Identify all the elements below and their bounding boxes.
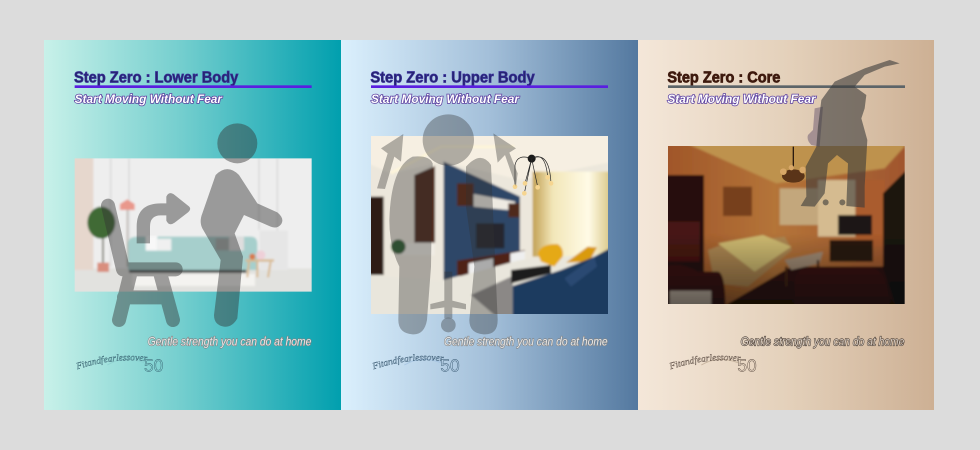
photo: modern blue living room <box>368 133 613 318</box>
logo: 50 <box>737 355 757 375</box>
photo: warm vintage living room <box>665 143 908 308</box>
head <box>423 114 474 166</box>
chair wheel <box>441 318 456 332</box>
panel: lower body <box>44 40 341 410</box>
heading underline <box>668 85 905 88</box>
panel background <box>638 40 934 410</box>
arrow <box>137 193 190 243</box>
right arm and leg <box>466 158 498 334</box>
right arrow <box>493 133 518 187</box>
chair back <box>808 107 823 147</box>
chair wheels <box>823 199 845 205</box>
heading underline <box>75 85 312 88</box>
subtitle: Start Moving Without Fear <box>667 93 817 106</box>
icon: seated person raising arms <box>377 114 518 334</box>
person head <box>217 123 257 163</box>
icon: chair with person standing and arrow <box>108 123 282 327</box>
subtitle: Start Moving Without Fear <box>371 93 520 106</box>
body with raised arm <box>801 60 900 208</box>
left arrow <box>377 134 403 189</box>
tagline: Gentle strength you can do at home <box>148 335 312 348</box>
logo: 50 <box>144 355 163 375</box>
subtitle: Start Moving Without Fear <box>75 93 223 106</box>
logo: Fitandfearlessover <box>372 354 444 370</box>
person body <box>201 169 282 327</box>
logo: 50 <box>440 355 460 375</box>
logo <box>76 354 163 375</box>
panel background <box>341 40 639 410</box>
logo: Fitandfearlessover <box>76 354 148 370</box>
chair <box>108 206 176 320</box>
heading: Step Zero : Upper Body <box>370 69 535 86</box>
logo: Fitandfearlessover <box>670 354 741 370</box>
tagline: Gentle strength you can do at home <box>741 335 905 348</box>
icon: seated side-bend silhouette <box>801 60 900 208</box>
panel: upper body <box>341 40 638 410</box>
heading underline <box>371 85 608 88</box>
chair base <box>430 272 466 318</box>
panel: core <box>638 40 934 410</box>
heading: Step Zero : Lower Body <box>74 69 238 86</box>
panel background <box>44 40 342 410</box>
heading: Step Zero : Core <box>667 69 780 86</box>
logo <box>372 354 460 375</box>
photo: light living room <box>71 155 316 295</box>
left arm and leg <box>389 156 433 334</box>
tagline: Gentle strength you can do at home <box>444 335 608 348</box>
logo <box>670 354 757 375</box>
